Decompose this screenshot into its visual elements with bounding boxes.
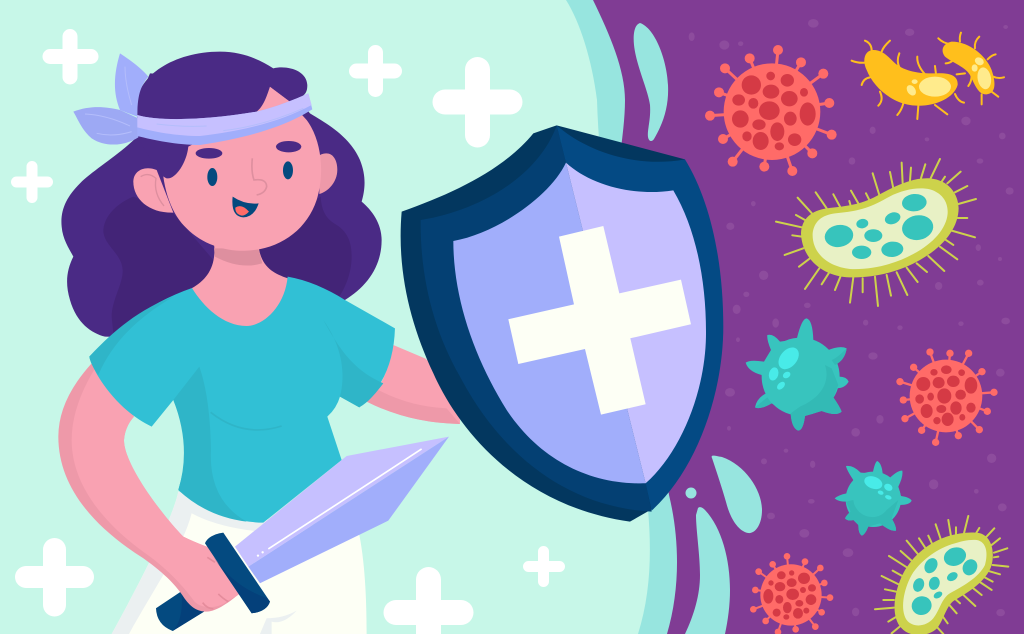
teal virus large <box>746 318 849 431</box>
shield cross <box>508 226 691 415</box>
woman: headband with knot <box>73 53 312 145</box>
mouth <box>232 197 259 217</box>
woman: left arm and hand <box>58 363 240 612</box>
eyebrows <box>196 141 301 159</box>
woman: neck <box>177 243 303 340</box>
green bacterium upper <box>776 159 976 306</box>
headband knot upper tail <box>115 53 148 117</box>
shield outer dark edge <box>401 125 685 522</box>
background: purple germ panel <box>593 0 1024 634</box>
woman: top hair and bangs <box>137 52 307 178</box>
woman: right arm reaching to shield <box>367 345 460 424</box>
headband fabric creases <box>85 67 303 135</box>
woman: left ear <box>133 168 173 213</box>
sword handle <box>156 590 207 631</box>
woman: teal shirt <box>89 277 395 523</box>
woman: face <box>162 87 321 251</box>
background: teal wave band <box>566 0 1024 634</box>
woman: pants <box>112 492 367 634</box>
plus signs <box>11 29 565 634</box>
green bacterium lower <box>875 516 1008 634</box>
eyes <box>207 161 293 186</box>
sword blade <box>235 437 449 583</box>
tongue <box>235 206 249 216</box>
sword guard <box>205 533 270 613</box>
shield face right half <box>566 163 706 483</box>
headband knot lower tail <box>73 107 138 145</box>
red virus top <box>705 45 837 176</box>
shield face left half <box>453 163 646 483</box>
yellow bacterium small <box>938 33 1004 104</box>
woman: facial features <box>196 141 301 217</box>
teal virus small <box>835 461 912 536</box>
shield right rim <box>557 125 723 511</box>
headband upper fold <box>137 93 312 136</box>
woman: right ear <box>319 153 337 194</box>
shield <box>401 125 723 522</box>
yellow bacterium large <box>852 41 965 119</box>
red virus middle <box>896 348 998 446</box>
headband strip <box>137 93 312 145</box>
woman: back hair <box>61 73 382 340</box>
water droplets <box>634 23 762 634</box>
shield left rim <box>421 125 652 512</box>
background speckles <box>689 19 1014 616</box>
nose <box>252 158 267 195</box>
red virus bottom <box>750 553 833 634</box>
